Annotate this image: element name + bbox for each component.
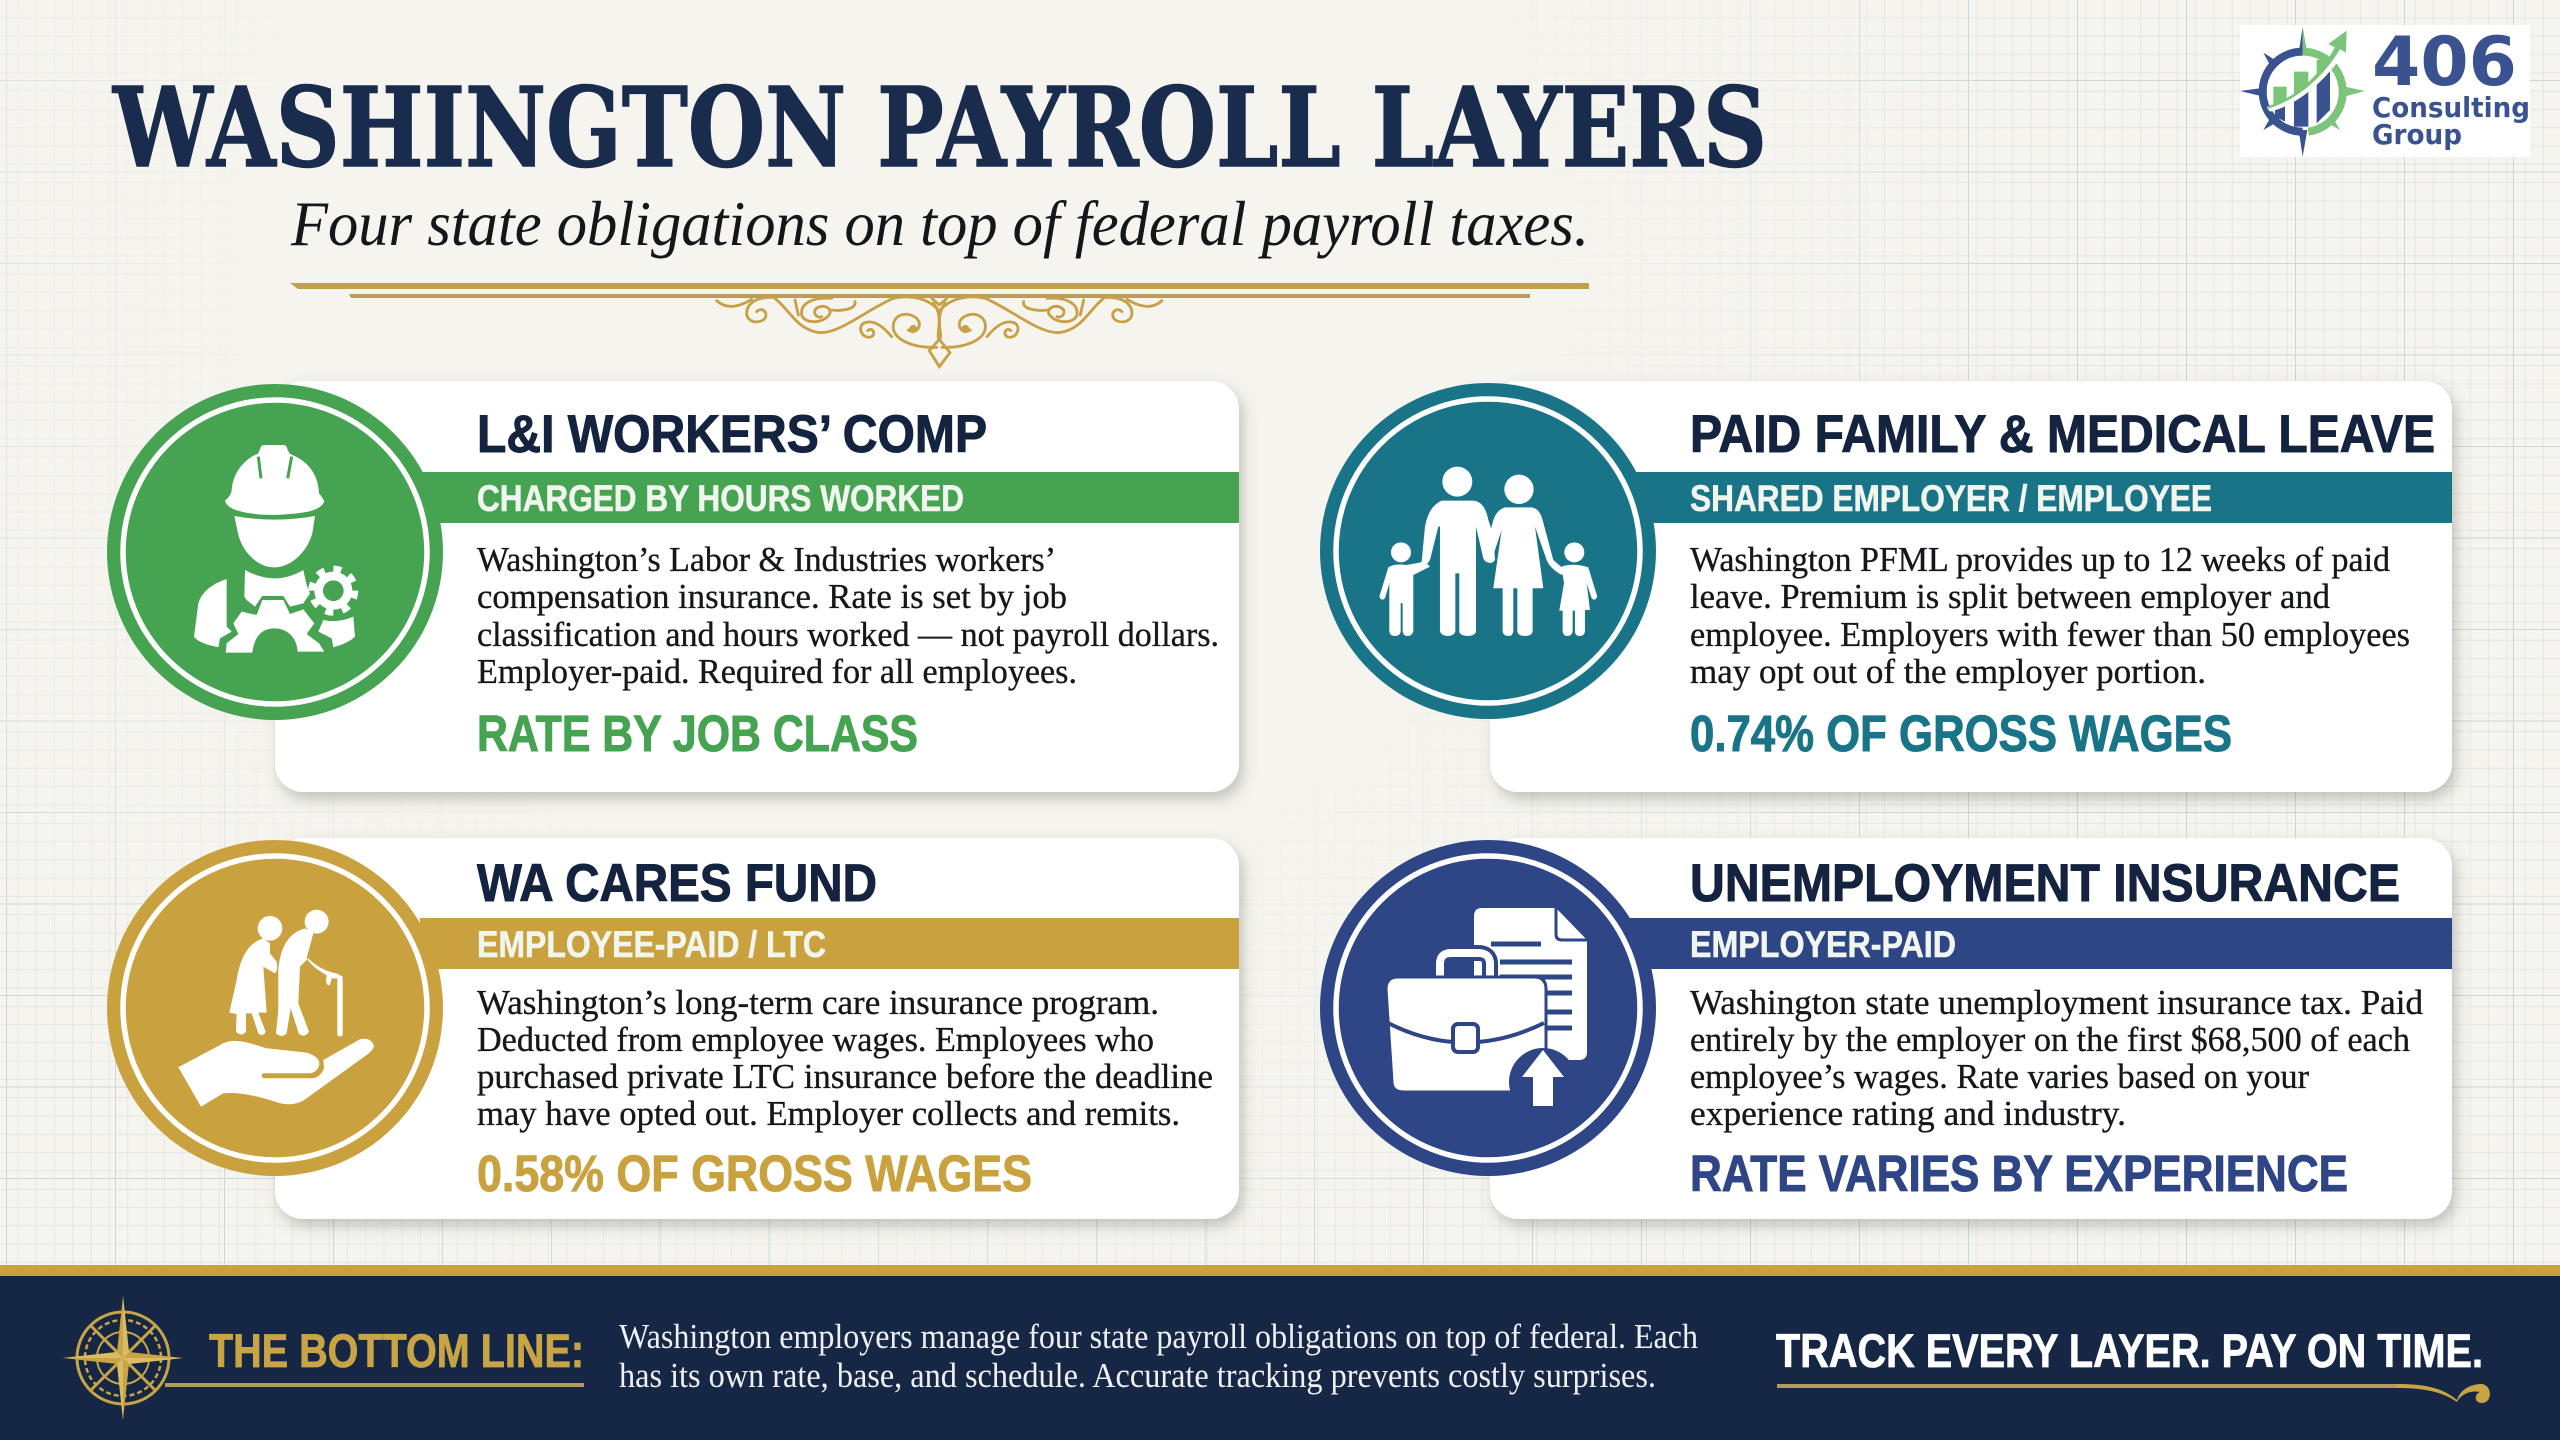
card background (1490, 838, 2452, 1219)
body text: Employer-paid. Required for all employees. (477, 652, 1077, 691)
body text (477, 540, 1219, 691)
heading: WA CARES FUND (477, 854, 877, 913)
body text: may have opted out. Employer collects and remits. (477, 1094, 1180, 1133)
heading: PAID FAMILY & MEDICAL LEAVE (1690, 405, 2435, 464)
body text: Washington PFML provides up to 12 weeks of paid (1690, 540, 2390, 579)
body text: employee’s wages. Rate varies based on your (1690, 1057, 2309, 1096)
green band (420, 472, 1239, 523)
body text: Washington state unemployment insurance tax. Paid (1690, 983, 2423, 1022)
body text: purchased private LTC insurance before the deadline (477, 1057, 1213, 1096)
icon: elderly couple in a hand (107, 840, 443, 1176)
header gold rule and ornament (290, 283, 1589, 367)
logo compass mark (2240, 27, 2365, 157)
icon: compass rose (63, 1296, 183, 1420)
body text: leave. Premium is split between employer and (1690, 577, 2330, 616)
summary text: Washington employers manage four state payroll obligations on top of federal. Each (619, 1317, 1698, 1356)
summary text: has its own rate, base, and schedule. Accurate tracking prevents costly surprises. (619, 1356, 1656, 1395)
body text: employee. Employers with fewer than 50 employees (1690, 615, 2410, 654)
body text: Washington’s long-term care insurance program. (477, 983, 1159, 1022)
rate callout: 0.74% OF GROSS WAGES (1690, 705, 2232, 762)
icon: construction worker with gears (107, 384, 443, 720)
body text: experience rating and industry. (1690, 1094, 2126, 1133)
body text (1690, 540, 2410, 691)
heading: UNEMPLOYMENT INSURANCE (1690, 854, 2400, 913)
body text: entirely by the employer on the first $68,500 of each (1690, 1020, 2410, 1059)
card background (275, 838, 1239, 1219)
band label: EMPLOYER-PAID (1690, 924, 1956, 965)
band label: CHARGED BY HOURS WORKED (477, 478, 964, 519)
logo Consulting text: Consulting (2372, 91, 2530, 124)
title: WASHINGTON PAYROLL LAYERS (112, 63, 1767, 192)
rate callout: RATE BY JOB CLASS (477, 705, 918, 762)
body text: Deducted from employee wages. Employees who (477, 1020, 1154, 1059)
navy band (1630, 918, 2452, 969)
heading: the bottom line: THE BOTTOM LINE: (209, 1324, 584, 1377)
panel: Unemployment Insurance (1320, 838, 2452, 1219)
rate callout: 0.58% OF GROSS WAGES (477, 1145, 1032, 1202)
body text: classification and hours worked — not payroll dollars. (477, 615, 1219, 654)
icon: briefcase and document (1320, 840, 1656, 1176)
teal band (1630, 472, 2452, 523)
logo 406 text: 406 (2372, 23, 2517, 102)
card background (1490, 381, 2452, 792)
logo: 406 Consulting Group (2240, 23, 2530, 157)
body text: Washington’s Labor & Industries workers’ (477, 540, 1056, 579)
gold band (420, 918, 1239, 969)
panel: WA Cares Fund (107, 838, 1239, 1219)
panel: Paid Family & Medical Leave (1320, 381, 2452, 792)
rate callout: RATE VARIES BY EXPERIENCE (1690, 1145, 2348, 1202)
logo Group text: Group (2372, 118, 2462, 151)
summary text (619, 1317, 1698, 1395)
band label: EMPLOYEE-PAID / LTC (477, 924, 826, 965)
body text (477, 983, 1213, 1133)
footer: the bottom line (0, 1265, 2560, 1440)
icon: family (1320, 383, 1656, 719)
subtitle: Four state obligations on top of federal payroll taxes. (290, 188, 1589, 259)
card background (275, 381, 1239, 792)
body text (1690, 983, 2423, 1133)
heading: L&I WORKERS’ COMP (477, 405, 987, 464)
body text: compensation insurance. Rate is set by job (477, 577, 1067, 616)
panel: L&I Workers' Comp (107, 381, 1239, 792)
body text: may opt out of the employer portion. (1690, 652, 2206, 691)
band label: SHARED EMPLOYER / EMPLOYEE (1690, 478, 2212, 519)
